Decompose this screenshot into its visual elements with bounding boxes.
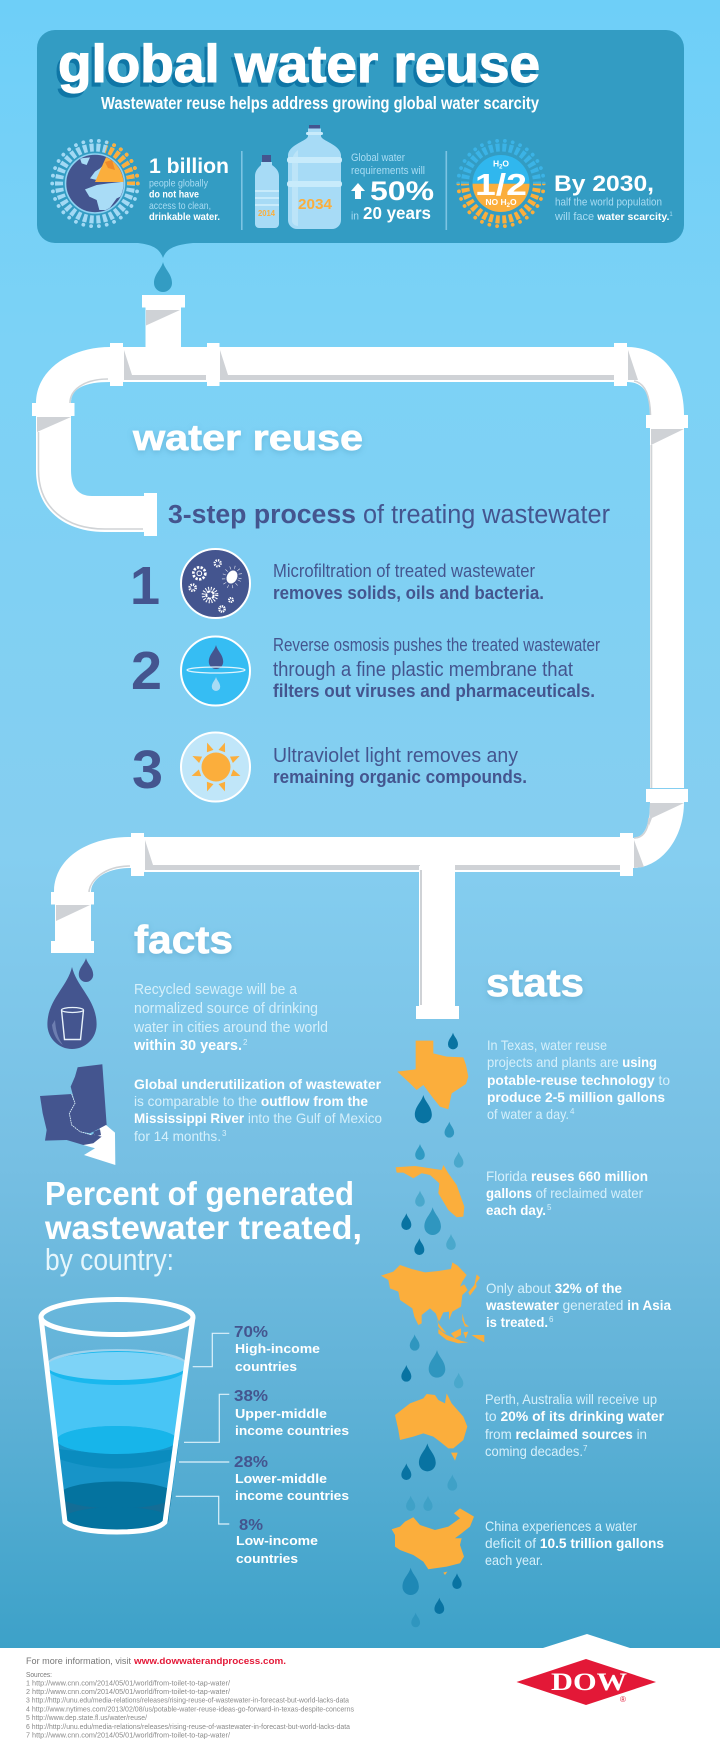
stat: 1 billion: do not have <box>149 188 199 200</box>
title: global water reuse <box>55 39 537 98</box>
title: global water reuse <box>58 35 540 94</box>
pipe: upper loop <box>32 295 688 788</box>
icon: half blue half orange people ring <box>458 141 544 226</box>
text: Texas stat: projects and plants are using <box>487 1054 657 1070</box>
stat: 1 billion: people globally <box>149 178 209 190</box>
pipe: top run <box>100 347 627 382</box>
subheading: 3-step process: of treating wastewater <box>363 501 610 529</box>
step 1 text <box>273 561 544 603</box>
stat: 1 billion: 1 billion <box>149 155 229 178</box>
heading: percent of generated wastewater treated: Percent of generated <box>45 1175 354 1212</box>
step 2 <box>131 635 600 706</box>
number 2: 2 <box>131 641 162 701</box>
heading: facts: facts <box>134 919 233 962</box>
text: recycled sewage fact <box>133 982 328 1054</box>
panel: header <box>37 30 684 258</box>
label 70 percent: High-income <box>235 1341 320 1356</box>
label 38 percent: income countries <box>235 1423 349 1438</box>
text: Texas stat: potable-reuse technology to <box>487 1072 670 1088</box>
label 28 percent: Lower-middle <box>235 1471 327 1486</box>
label 8 percent: countries <box>236 1551 298 1566</box>
label 38 percent <box>234 1388 349 1438</box>
icon: small bottle 2014: 2014 <box>258 209 276 218</box>
sources <box>26 1670 354 1740</box>
speech bubble shape <box>37 30 684 258</box>
text: Texas stat: In Texas, water reuse <box>487 1037 607 1053</box>
label 28 percent: 28% <box>234 1454 268 1471</box>
text: Perth stat: coming decades. <box>485 1443 583 1459</box>
chart: water glass <box>40 1300 349 1566</box>
stat: 50 percent in 20 years: requirements will <box>351 165 425 177</box>
panel: footer <box>0 1634 720 1741</box>
icon: globe with ring of people <box>52 141 138 226</box>
text: Perth stat: to 20% of its drinking water <box>485 1408 665 1424</box>
icon: Mississippi river map <box>40 1064 115 1165</box>
label 8 percent <box>236 1517 318 1566</box>
step 1 <box>130 549 544 618</box>
text: Asia stat: wastewater generated in Asia <box>485 1297 671 1313</box>
sources: 1 http://www.cnn.com/2014/05/01/world/from-toilet-to-tap-water/ <box>26 1680 230 1688</box>
text: Asia stat: 6 <box>549 1315 554 1324</box>
icon: large bottle 2034: 2034 <box>298 196 333 213</box>
map: Texas <box>397 1041 468 1109</box>
water layers <box>48 1349 189 1530</box>
more information line: www.dowwaterandprocess.com. <box>133 1656 286 1667</box>
text: recycled sewage fact: water in cities around the world <box>133 1020 328 1036</box>
text: Texas stat: 4 <box>570 1107 575 1116</box>
text: recycled sewage fact: 2 <box>243 1038 248 1047</box>
sources: 7 http://www.cnn.com/2014/05/01/world/from-toilet-to-tap-water/ <box>26 1732 230 1740</box>
pipe: horizontal run <box>131 837 620 872</box>
pipe: top-left elbow and left run <box>32 347 157 536</box>
text: recycled sewage fact: Recycled sewage will be a <box>134 982 298 998</box>
step 2 text: Reverse osmosis pushes the treated wastewater <box>273 635 600 655</box>
label 38 percent: Upper-middle <box>235 1406 327 1421</box>
sources: 4 http://www.nytimes.com/2013/02/08/us/potable-water-reuse-ideas-go-forward-in-texas-despite-concerns <box>26 1706 354 1714</box>
text: underutilization fact: is comparable to the outflow from the <box>134 1093 368 1109</box>
text: Perth stat: from reclaimed sources in <box>485 1426 647 1442</box>
step 2 text: through a fine plastic membrane that <box>273 658 573 681</box>
stat: By 2030: 1 <box>669 212 673 218</box>
text: China stat: each year. <box>485 1552 543 1568</box>
pipe: lower run with T <box>51 789 688 1019</box>
stat: By 2030: will face water scarcity. <box>555 211 669 223</box>
leader lines <box>176 1333 229 1524</box>
label 70 percent: countries <box>235 1359 297 1374</box>
step 2 text: filters out viruses and pharmaceuticals. <box>273 681 595 701</box>
pipe: T outlet to stats <box>416 866 459 1019</box>
stat: 1 billion: access to clean, <box>149 200 211 212</box>
step 3 text <box>273 745 527 787</box>
pipe: T inlet <box>142 295 185 349</box>
logo: Dow diamond: ® <box>620 1695 626 1704</box>
text: recycled sewage fact: normalized source of drinking <box>134 1001 318 1017</box>
subheading: 3-step process <box>168 501 610 529</box>
text: Perth stat: Perth, Australia will receive up <box>485 1391 657 1407</box>
icon: half blue half orange people ring: O <box>502 158 509 168</box>
text: China stat: China experiences a water <box>485 1518 637 1534</box>
logo: Dow diamond <box>516 1659 656 1705</box>
sources: 3 http://http://unu.edu/media-relations/releases/rising-reuse-of-wastewater-in-forecast-but-world-lacks-data <box>26 1698 349 1704</box>
step 3 text: Ultraviolet light removes any <box>273 745 518 767</box>
map: Australia <box>395 1393 467 1461</box>
falling drops <box>401 1033 463 1627</box>
text: underutilization fact <box>134 1076 382 1144</box>
label 28 percent: income countries <box>235 1488 349 1503</box>
stat: 50 percent in 20 years: Global water <box>351 152 405 164</box>
icon: falling drop from header <box>154 262 172 292</box>
subheading: 3-step process: 3-step process <box>168 501 356 529</box>
stat: 1 billion: drinkable water. <box>149 211 220 223</box>
map: Asia <box>381 1262 484 1343</box>
text: Texas stat: of water a day. <box>487 1106 569 1122</box>
text: Asia stat: is treated. <box>486 1314 548 1330</box>
step 1 text: removes solids, oils and bacteria. <box>273 583 544 603</box>
more information line: For more information, visit <box>26 1656 131 1667</box>
heading: water reuse: water reuse <box>132 417 363 458</box>
text: Florida stat: each day. <box>486 1202 546 1218</box>
stat: 50 percent in 20 years: 50% <box>370 176 434 206</box>
text: underutilization fact: 3 <box>222 1129 227 1138</box>
number 3: 3 <box>132 740 163 800</box>
map: Florida <box>396 1165 464 1217</box>
stat: 1 billion <box>149 155 229 223</box>
heading: percent of generated wastewater treated: wastewater treated, <box>44 1209 362 1246</box>
step 3 <box>132 732 527 802</box>
map: China <box>392 1508 474 1575</box>
text: underutilization fact: Global underutilization of wastewater <box>134 1076 382 1092</box>
heading: stats: stats <box>486 962 584 1005</box>
icon: sun <box>181 732 250 802</box>
pipe: right elbow and right run <box>627 347 688 788</box>
icon: half blue half orange people ring: H <box>493 158 499 168</box>
pipe couplings <box>110 343 627 386</box>
sources: 5 http://www.dep.state.fl.us/water/reuse/ <box>26 1715 147 1722</box>
logo: Dow diamond: DOW <box>551 1669 627 1696</box>
text: recycled sewage fact: within 30 years. <box>133 1038 242 1054</box>
icon: membrane <box>181 636 250 706</box>
step 1 text: Microfiltration of treated wastewater <box>273 561 535 581</box>
text: Perth stat <box>485 1391 665 1459</box>
label 38 percent: 38% <box>234 1388 268 1405</box>
label 28 percent <box>234 1454 349 1503</box>
stat: 50 percent in 20 years: in <box>351 210 359 222</box>
text: Florida stat: 5 <box>547 1203 552 1212</box>
icon: half blue half orange people ring: O <box>510 197 517 207</box>
text: Florida stat <box>486 1168 648 1218</box>
more information line <box>26 1656 286 1667</box>
sources: Sources: <box>26 1670 52 1679</box>
text: Perth stat: 7 <box>583 1444 588 1453</box>
step 3 text: remaining organic compounds. <box>273 767 527 787</box>
glass outline <box>41 1300 193 1532</box>
text: underutilization fact: Mississippi River into the Gulf of Mexico <box>134 1110 382 1126</box>
stat: 50 percent in 20 years <box>351 152 434 223</box>
step 2 text <box>273 635 600 701</box>
pipe: left elbow to facts <box>51 837 131 953</box>
stat: By 2030: half the world population <box>555 197 662 209</box>
text: China stat: deficit of 10.5 trillion gallons <box>485 1535 664 1551</box>
text: Florida stat: Florida reuses 660 million <box>486 1168 648 1184</box>
icon: microbes <box>181 549 250 618</box>
label 8 percent: Low-income <box>236 1533 318 1548</box>
footer background with notch <box>0 1634 720 1741</box>
label 70 percent: 70% <box>234 1324 268 1341</box>
heading: percent of generated wastewater treated: by country: <box>45 1242 174 1277</box>
icon: half blue half orange people ring: 2 <box>499 164 503 170</box>
pipe: right lower elbow <box>633 789 688 868</box>
stat: 50 percent in 20 years: 20 years <box>363 203 431 223</box>
heading: percent of generated wastewater treated <box>44 1175 362 1277</box>
stat: By 2030 <box>554 171 673 223</box>
text: Florida stat: gallons of reclaimed water <box>486 1185 643 1201</box>
icon: half blue half orange people ring: 2 <box>507 203 511 209</box>
icon: up arrow <box>351 183 365 199</box>
text: Asia stat <box>485 1280 671 1330</box>
number 1: 1 <box>130 556 160 616</box>
icon: large bottle 2034 <box>287 125 342 229</box>
sources: 2 http://www.cnn.com/2014/05/01/world/from-toilet-to-tap-water/ <box>26 1689 230 1696</box>
icon: small bottle 2014 <box>255 155 279 228</box>
text: Texas stat <box>487 1037 670 1122</box>
text: Texas stat: produce 2-5 million gallons <box>487 1089 665 1105</box>
stat: By 2030: By 2030, <box>554 171 654 196</box>
text: China stat <box>485 1518 664 1568</box>
label 70 percent <box>234 1324 320 1374</box>
label 8 percent: 8% <box>239 1517 263 1534</box>
text: underutilization fact: for 14 months. <box>134 1128 221 1144</box>
icon: drop with glass <box>47 958 97 1049</box>
subtitle: Wastewater reuse helps address growing global water scarcity <box>101 93 539 113</box>
icon: half blue half orange people ring: 1/2 <box>475 167 527 202</box>
sources: 6 http://http://unu.edu/media-relations/releases/rising-reuse-of-wastewater-in-forecast-but-world-lacks-data <box>26 1724 350 1731</box>
icon: half blue half orange people ring: NO H <box>485 197 507 207</box>
pipe couplings lower <box>131 833 633 876</box>
text: Asia stat: Only about 32% of the <box>486 1280 622 1296</box>
